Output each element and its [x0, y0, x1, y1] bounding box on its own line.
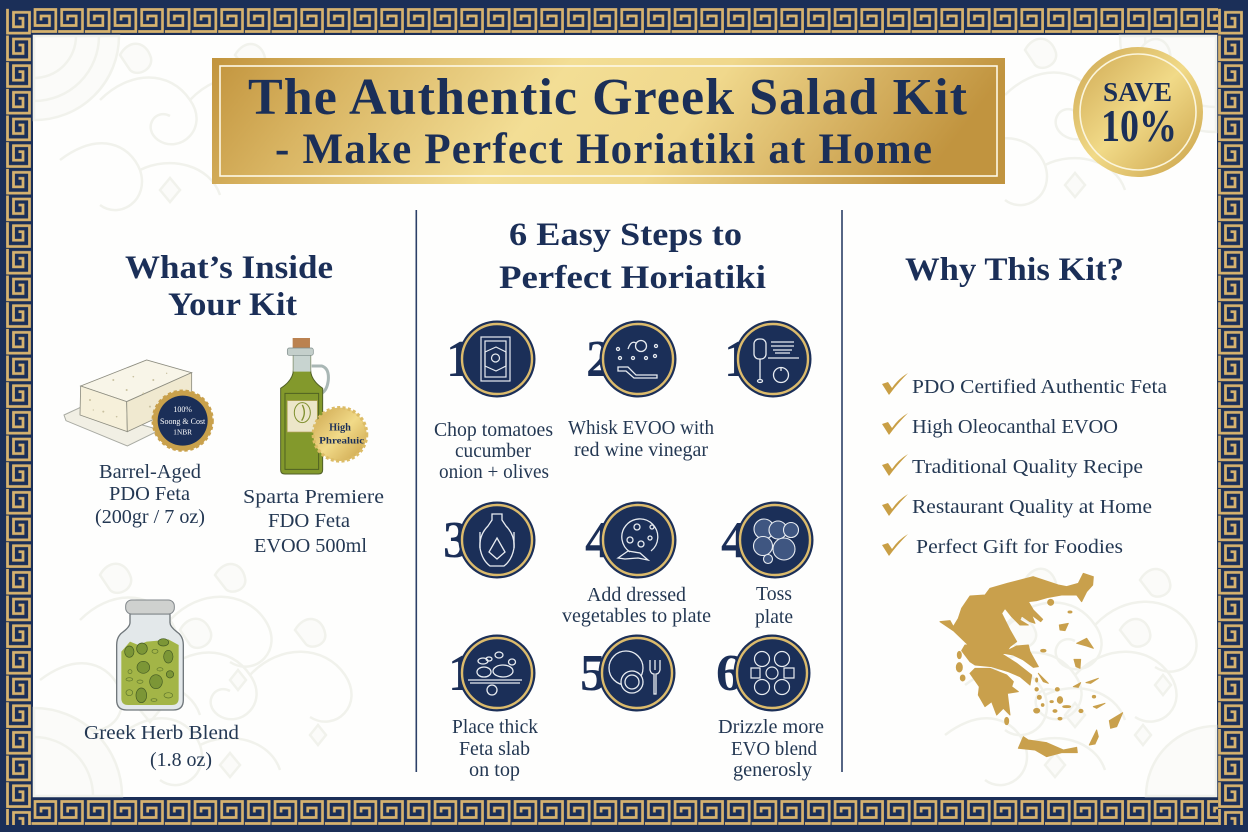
step 2 text — [568, 417, 714, 461]
step place feta text — [452, 716, 538, 781]
heading: steps — [499, 217, 766, 296]
step icon: row 1 centre: 2 — [586, 331, 612, 388]
step place feta text: Place thick — [452, 716, 538, 738]
benefit: restaurant quality: Restaurant Quality at Home — [912, 496, 1152, 518]
step icon: row 2 right — [721, 502, 814, 578]
illustration: olive oil bottle with badge — [281, 338, 367, 474]
step icon: row 1 centre — [586, 320, 676, 398]
step toss text — [755, 583, 793, 628]
illustration: feta block with badge: 1NBR — [173, 428, 192, 437]
text: olive oil: FDO Feta — [268, 510, 350, 532]
text: olive oil: EVOO 500ml — [254, 535, 367, 557]
save 10% seal: 10% — [1101, 101, 1177, 151]
step 4 text: vegetables to plate — [562, 605, 711, 627]
heading: what's inside: Your Kit — [168, 287, 297, 323]
text: feta: PDO Feta — [109, 483, 190, 505]
panel: what's inside your kit — [64, 250, 384, 771]
text: herb blend — [84, 722, 239, 771]
step icon: row 3 left — [448, 634, 536, 712]
illustration: olive oil bottle with badge: High — [329, 423, 351, 434]
step place feta text: on top — [469, 759, 520, 781]
step icon: row 2 right: 4 — [721, 512, 747, 569]
map of Greece — [940, 573, 1123, 757]
benefit: PDO certified: PDO Certified Authentic Feta — [912, 376, 1167, 398]
text: olive oil: Sparta Premiere — [243, 486, 384, 508]
step 4 text: Add dressed — [587, 584, 686, 606]
step icon: row 3 centre — [580, 634, 676, 712]
heading: why this kit: Why This Kit? — [905, 252, 1124, 288]
title line 2: - Make Perfect Horiatiki at Home — [275, 126, 932, 173]
step icon: row 2 centre: 4 — [585, 512, 611, 569]
text: feta — [95, 461, 205, 528]
text: herb blend: Greek Herb Blend — [84, 722, 239, 744]
illustration: olive oil bottle with badge: Phrealuic — [319, 436, 364, 446]
step icon: row 1 left — [446, 320, 536, 398]
title line 1: The Authentic Greek Salad Kit — [248, 69, 968, 126]
panel: 6 easy steps — [434, 217, 824, 781]
step icon: row 3 right: 6 — [716, 645, 742, 702]
step 1 text: onion + olives — [439, 461, 549, 483]
step 4 text — [562, 584, 711, 627]
text: herb blend: (1.8 oz) — [150, 749, 212, 771]
heading: steps: 6 Easy Steps to — [509, 217, 742, 253]
heading: what's inside — [125, 250, 333, 323]
column divider right — [841, 210, 843, 772]
illustration: herb jar — [117, 600, 183, 710]
illustration: feta block with badge: 100% — [173, 405, 192, 414]
text: olive oil — [243, 486, 384, 557]
heading: steps: Perfect Horiatiki — [499, 260, 766, 296]
step icon: row 3 right — [716, 634, 810, 712]
step toss text: Toss — [756, 583, 792, 605]
step icon: row 1 left: 1 — [446, 331, 472, 388]
step place feta text: Feta slab — [459, 738, 530, 760]
save 10% seal — [1073, 47, 1203, 177]
illustration: feta block with badge — [64, 360, 213, 451]
step 2 text: Whisk EVOO with — [568, 417, 714, 439]
save 10% seal: SAVE — [1103, 77, 1172, 107]
illustration: feta block with badge: Soong & Cost — [160, 417, 206, 426]
benefit: recipe: Traditional Quality Recipe — [912, 456, 1143, 478]
step 1 text — [434, 419, 553, 483]
column divider left — [416, 210, 417, 772]
text: feta: Barrel-Aged — [99, 461, 201, 483]
step 1 text: Chop tomatoes — [434, 419, 553, 441]
step icon: row 3 centre: 5 — [580, 645, 606, 702]
step icon: row 2 left — [443, 502, 536, 578]
step 2 text: red wine vinegar — [574, 439, 708, 461]
benefit: gift: Perfect Gift for Foodies — [916, 536, 1123, 558]
text: feta: (200gr / 7 oz) — [95, 506, 205, 528]
step toss text: plate — [755, 606, 793, 628]
step drizzle text: Drizzle more — [718, 716, 824, 738]
panel: why this kit — [882, 252, 1167, 757]
step drizzle text — [718, 716, 824, 781]
step icon: row 1 right: 1 — [724, 331, 750, 388]
title banner — [212, 58, 1005, 184]
step icon: row 3 left: 1 — [448, 645, 474, 702]
step drizzle text: generosly — [733, 759, 812, 781]
step drizzle text: EVO blend — [731, 738, 817, 760]
step icon: row 2 left: 3 — [443, 512, 469, 569]
step 1 text: cucumber — [455, 440, 531, 462]
step icon: row 1 right — [724, 320, 812, 398]
heading: what's inside: What’s Inside — [125, 250, 333, 286]
benefit: oleocanthal: High Oleocanthal EVOO — [912, 416, 1118, 438]
step icon: row 2 centre — [585, 502, 676, 578]
